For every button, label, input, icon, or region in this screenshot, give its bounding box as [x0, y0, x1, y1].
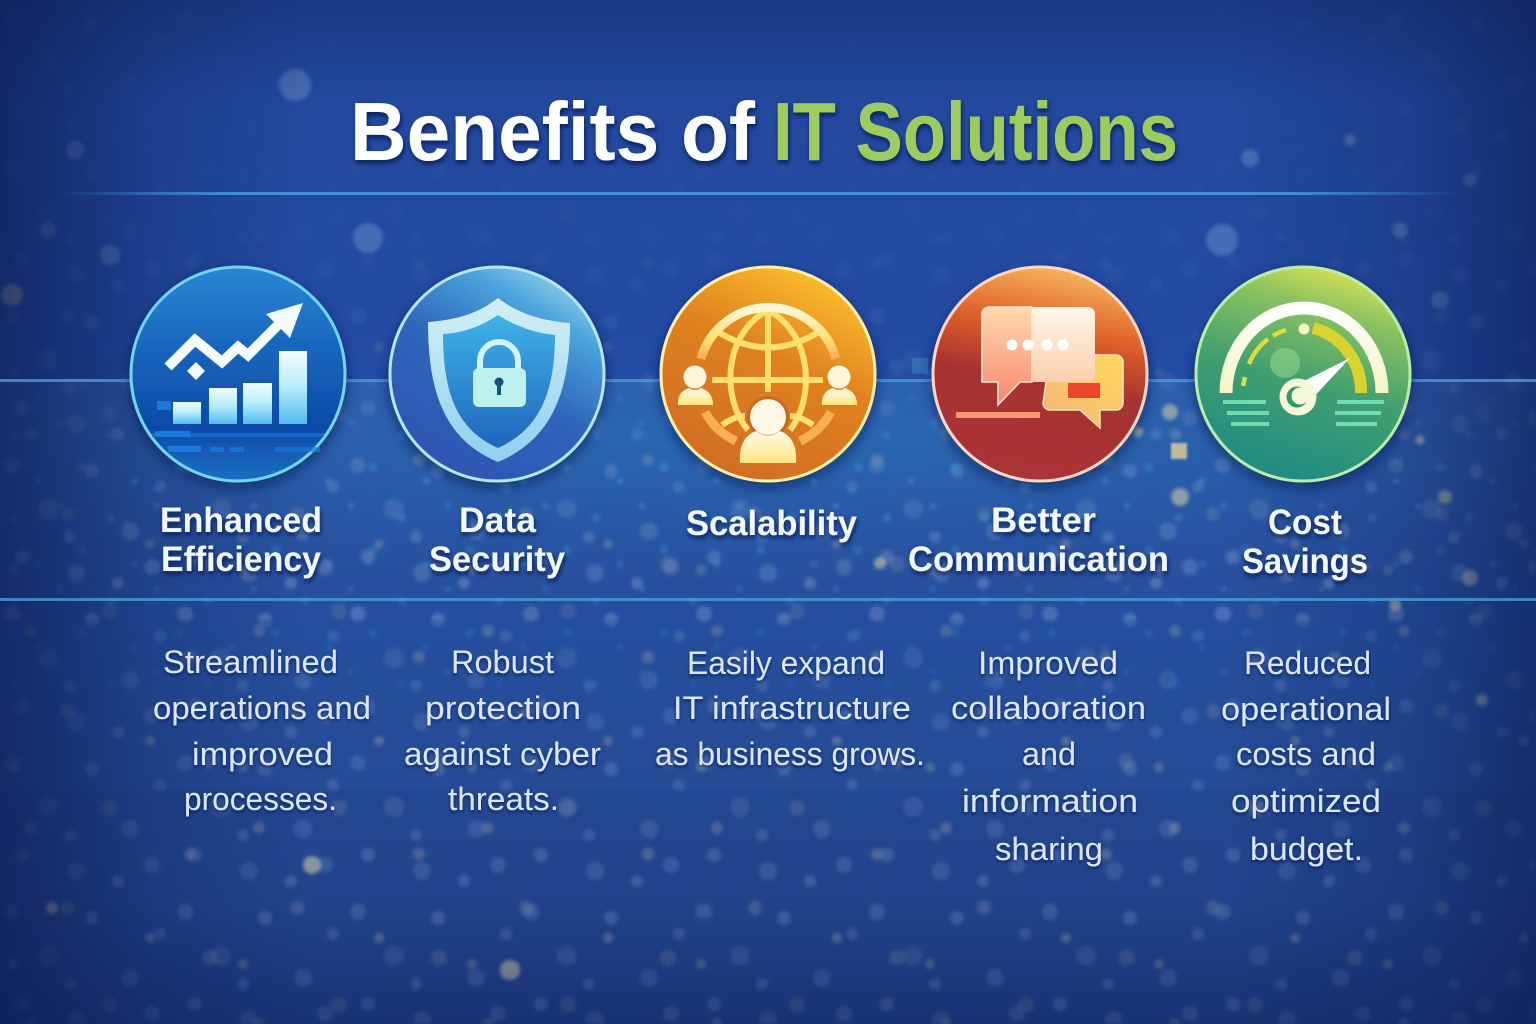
heading: Savings — [1242, 542, 1368, 581]
description: information — [962, 783, 1138, 819]
heading: Security — [429, 540, 566, 579]
description — [404, 644, 601, 817]
description: Robust — [451, 644, 554, 680]
description: and — [1022, 736, 1076, 772]
description — [951, 645, 1146, 867]
heading: Scalability — [686, 504, 858, 543]
heading: Data — [459, 501, 537, 540]
heading — [1242, 503, 1368, 581]
description: threats. — [448, 781, 559, 817]
description: costs and — [1236, 736, 1376, 772]
description: protection — [425, 690, 581, 726]
description: Streamlined — [163, 644, 338, 680]
heading — [908, 501, 1169, 579]
description: as business grows. — [655, 736, 925, 772]
description: IT infrastructure — [673, 690, 911, 726]
heading: Enhanced — [160, 501, 322, 540]
icon: growth chart — [131, 267, 345, 481]
title — [350, 85, 1178, 178]
heading — [160, 501, 322, 579]
description: Reduced — [1244, 645, 1371, 681]
description: operational — [1221, 691, 1391, 727]
description: processes. — [184, 781, 337, 817]
heading: Efficiency — [161, 540, 322, 579]
description — [153, 644, 371, 817]
icon: speedometer gauge — [1196, 267, 1410, 481]
description: collaboration — [951, 690, 1146, 726]
icon: speech bubbles — [933, 267, 1147, 481]
description: improved — [192, 736, 333, 772]
description — [1221, 645, 1391, 867]
description: against cyber — [404, 736, 601, 772]
panel: cost savings — [1196, 267, 1410, 867]
description: budget. — [1250, 831, 1363, 867]
panel: enhanced efficiency — [131, 267, 371, 817]
horizontal rule lines — [0, 192, 1536, 601]
heading: Better — [991, 501, 1096, 540]
description: Improved — [978, 645, 1118, 681]
title: Benefits of — [350, 85, 755, 178]
description: sharing — [995, 831, 1103, 867]
heading: Cost — [1268, 503, 1342, 542]
heading: Communication — [908, 540, 1169, 579]
icon: shield with padlock — [390, 267, 604, 481]
panel: data security — [390, 267, 604, 817]
heading — [429, 501, 566, 579]
description — [655, 645, 925, 772]
description: optimized — [1231, 783, 1381, 819]
panel: better communication — [908, 267, 1169, 867]
panel: scalability — [655, 267, 925, 772]
icon: globe with people — [661, 267, 875, 481]
description: operations and — [153, 690, 371, 726]
description: Easily expand — [687, 645, 885, 681]
title: IT Solutions — [773, 85, 1178, 178]
